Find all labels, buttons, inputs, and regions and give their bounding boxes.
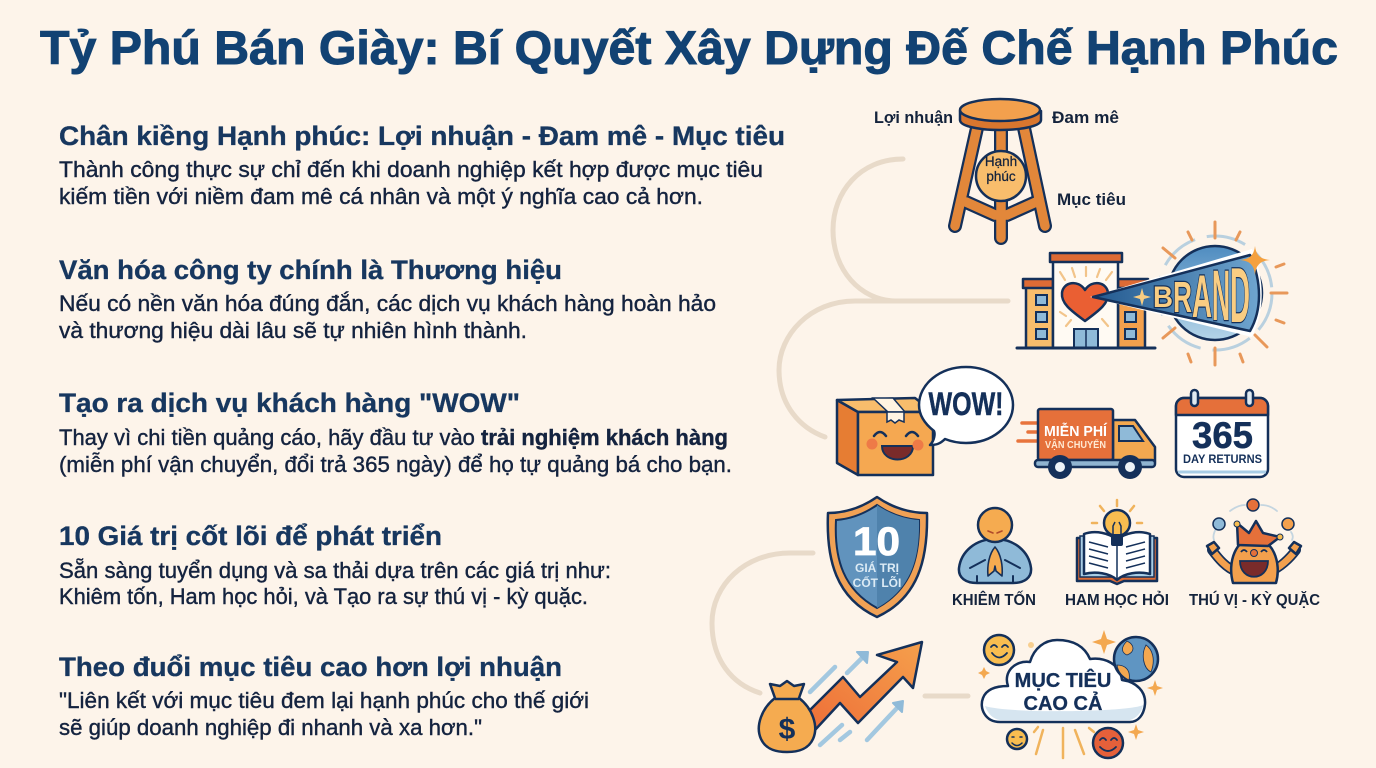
body text: và thương hiệu dài lâu sẽ tự nhiên hình thành.	[59, 318, 527, 343]
stool label: purpose: Mục tiêu	[1057, 190, 1126, 209]
text block: higher purpose	[59, 652, 589, 740]
heading: Chân kiềng Hạnh phúc: Lợi nhuận - Đam mê - Mục tiêu	[59, 121, 785, 151]
heading: Tạo ra dịch vụ khách hàng "WOW"	[59, 388, 520, 418]
icon: free shipping truck: VẬN CHUYỂN	[1045, 438, 1106, 451]
icon: free shipping truck	[1018, 409, 1155, 478]
body text	[59, 558, 611, 609]
icon: 365 day returns calendar: DAY RETURNS	[1183, 452, 1262, 466]
dollar sign: $	[779, 713, 796, 746]
cloud text: MỤC TIÊU	[1015, 668, 1111, 692]
icon: 10 core values shield: CỐT LÕI	[853, 575, 901, 590]
icon: happiness stool	[874, 99, 1126, 238]
quirky label: THÚ VỊ - KỲ QUẶC	[1189, 590, 1320, 609]
stool label: happiness: phúc	[986, 169, 1016, 184]
icon: money bag with rising arrow	[759, 642, 922, 752]
truck label: MIỄN PHÍ	[1044, 423, 1108, 440]
heading: Văn hóa công ty chính là Thương hiệu	[59, 255, 562, 285]
icon: brand megaphone beam	[1090, 222, 1287, 365]
icon: humility praying person	[952, 508, 1036, 609]
brand text: B	[1153, 281, 1173, 314]
body text: (miễn phí vận chuyển, đổi trả 365 ngày) để họ tự quảng bá cho bạn.	[59, 452, 732, 477]
body text	[59, 688, 589, 740]
body text: Sẵn sàng tuyển dụng và sa thải dựa trên các giá trị như:	[59, 558, 611, 583]
heading: Theo đuổi mục tiêu cao hơn lợi nhuận	[59, 652, 562, 682]
brand text	[1153, 251, 1250, 339]
speech bubble	[919, 367, 1013, 445]
icon: eager to learn book and bulb	[1065, 500, 1169, 609]
icon: company building with heart	[1017, 253, 1155, 348]
shield text: 10	[853, 520, 900, 564]
text block: three-legged stool	[59, 121, 785, 209]
icon: 10 core values shield	[828, 497, 927, 617]
stool label: profit: Lợi nhuận	[874, 108, 953, 127]
body text: kiếm tiền với niềm đam mê cá nhân và một ý nghĩa cao cả hơn.	[59, 184, 703, 209]
icon: brand megaphone beam: D	[1230, 251, 1250, 339]
icon: 365 day returns calendar	[1176, 390, 1268, 477]
body text: Khiêm tốn, Ham học hỏi, và Tạo ra sự thú vị - kỳ quặc.	[59, 584, 588, 609]
calendar number: 365	[1192, 415, 1253, 456]
body text	[59, 157, 763, 209]
learning label: HAM HỌC HỎI	[1065, 590, 1169, 609]
connector path	[712, 159, 1008, 696]
brand text: A	[1192, 263, 1212, 330]
stool label: passion: Đam mê	[1052, 108, 1119, 127]
heading: 10 Giá trị cốt lõi để phát triển	[59, 521, 442, 551]
body text: sẽ giúp doanh nghiệp đi nhanh và xa hơn."	[59, 715, 482, 740]
title: Tỷ Phú Bán Giày: Bí Quyết Xây Dựng Đế Chế Hạnh Phúc	[40, 21, 1338, 74]
text block: culture is brand	[59, 255, 716, 343]
stool label: happiness: Hạnh	[985, 154, 1017, 169]
humility label: KHIÊM TỐN	[952, 589, 1036, 609]
WOW text: WOW!	[928, 386, 1004, 422]
icon: fun and quirky jester	[1189, 499, 1320, 609]
icon: 10 core values shield: GIÁ TRỊ	[855, 560, 899, 575]
brand text: R	[1173, 273, 1192, 322]
brand text: N	[1212, 257, 1230, 336]
body text: Thay vì chi tiền quảng cáo, hãy đầu tư vào trải nghiệm khách hàng	[59, 425, 728, 450]
text block: WOW service	[59, 388, 732, 477]
icon: higher purpose cloud	[978, 630, 1163, 758]
text block: core values	[59, 521, 611, 609]
body text: Nếu có nền văn hóa đúng đắn, các dịch vụ khách hàng hoàn hảo	[59, 291, 716, 316]
body text	[59, 425, 732, 477]
body text: Thành công thực sự chỉ đến khi doanh nghiệp kết hợp được mục tiêu	[59, 157, 763, 182]
body text	[59, 291, 716, 343]
icon: higher purpose cloud: CAO CẢ	[1024, 692, 1102, 715]
icon: happy box with WOW bubble	[837, 367, 1013, 475]
body text: "Liên kết với mục tiêu đem lại hạnh phúc cho thế giới	[59, 688, 589, 713]
